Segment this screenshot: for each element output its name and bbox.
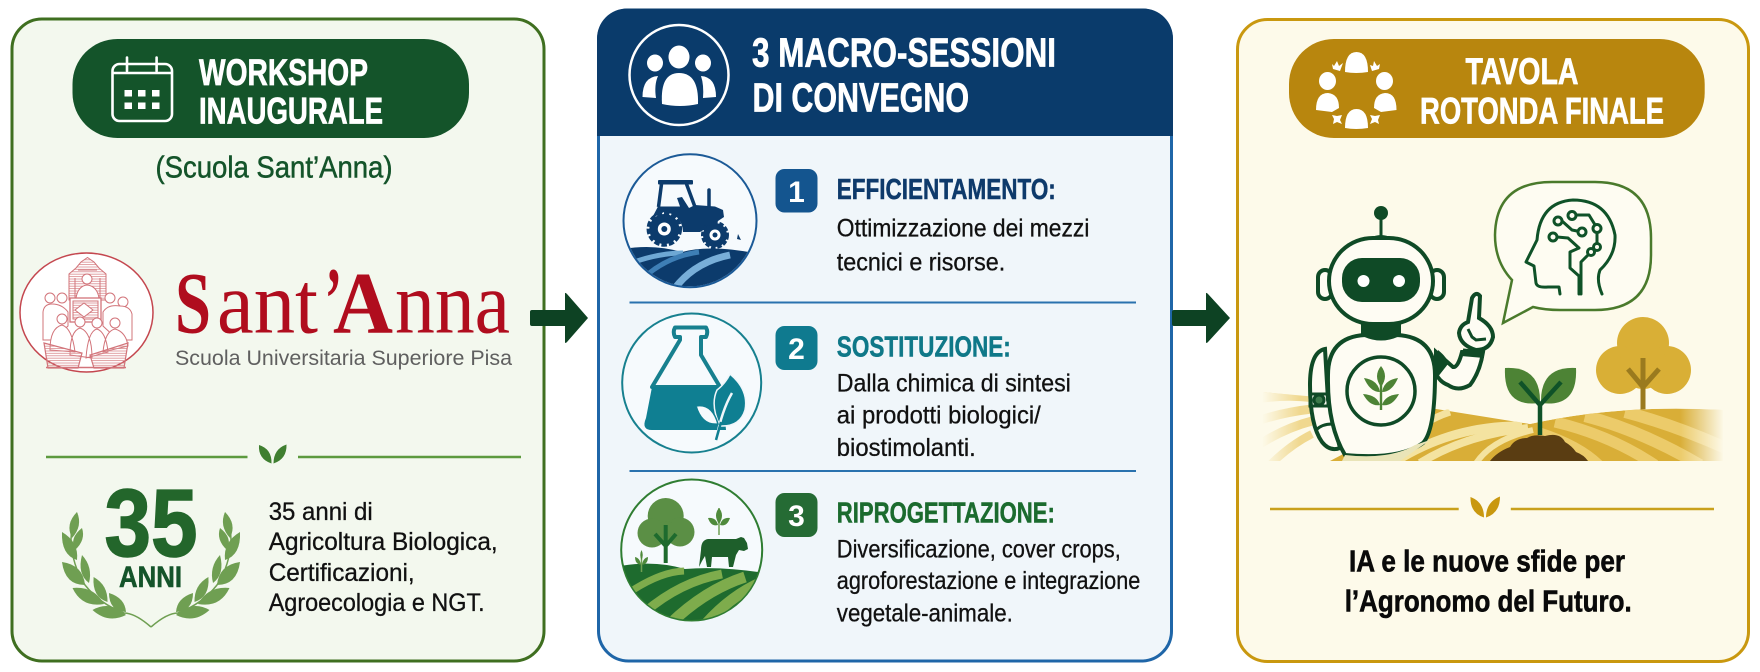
arrow: sessions to tavola	[1172, 293, 1230, 343]
robot left arm	[1310, 349, 1340, 449]
robot body	[1328, 335, 1435, 456]
icon: tractor	[620, 154, 760, 290]
badge: 35 anni laurel	[62, 470, 240, 627]
badge: number 1	[776, 169, 818, 212]
badge: number 2: 2	[788, 333, 805, 366]
text: 35 anni description: 35 anni di	[269, 498, 373, 526]
icon: round table	[1316, 52, 1396, 129]
description: sostituzione: ai prodotti biologici/	[837, 402, 1041, 430]
subheading: scuola sant'anna: (Scuola Sant’Anna)	[156, 150, 392, 184]
description: sostituzione: Dalla chimica di sintesi	[837, 370, 1071, 398]
title: riprogettazione: RIPROGETTAZIONE:	[837, 498, 1055, 530]
logo wordmark: sant'anna: nna	[395, 256, 510, 353]
tavola header pill	[1289, 39, 1705, 138]
text: 35 anni description: Agricoltura Biologica,	[269, 528, 498, 556]
robot chest emblem	[1347, 357, 1415, 425]
robot hand	[1459, 294, 1493, 350]
icon: head with circuits	[1526, 200, 1615, 294]
icon: calendar	[112, 58, 172, 121]
workshop header pill	[72, 39, 469, 138]
icon: gold tree	[1596, 317, 1691, 412]
logo subtitle: Scuola Universitaria Superiore Pisa	[175, 347, 512, 370]
description: efficientamento: tecnici e risorse.	[837, 249, 1005, 277]
panel: tavola rotonda	[1238, 20, 1748, 662]
icon: flask with leaf	[622, 314, 761, 452]
session 2: sostituzione	[622, 314, 1071, 462]
workshop heading: WORKSHOP	[199, 52, 368, 93]
closing text: l’Agronomo del Futuro.	[1345, 584, 1632, 619]
session heading: DI CONVEGNO	[752, 75, 969, 121]
icon: soil mound	[1490, 435, 1588, 461]
divider with leaf	[46, 444, 521, 464]
arrow: workshop to sessions	[530, 293, 588, 343]
badge: number 3: 3	[788, 500, 805, 533]
number 35: 35	[104, 470, 198, 577]
icon: laurel wreath	[62, 512, 240, 627]
description: efficientamento: Ottimizzazione dei mezzi	[837, 215, 1089, 243]
illustration: field, sprout and tree	[1260, 317, 1730, 470]
icon: people in circle	[630, 25, 728, 125]
divider with gold leaf	[1270, 496, 1714, 518]
badge: number 2	[776, 326, 818, 370]
icon: speech bubble with ai head	[1495, 182, 1651, 323]
panel: macro-sessioni	[597, 8, 1173, 661]
session 3: riprogettazione	[620, 480, 1140, 628]
logo wordmark: sant'anna: ’	[325, 251, 342, 348]
badge: number 3	[776, 493, 818, 537]
icon: sprout	[1505, 368, 1576, 435]
description: sostituzione: biostimolanti.	[837, 434, 976, 462]
closing text: IA e le nuove sfide per	[1349, 544, 1625, 579]
session header	[597, 8, 1173, 136]
tavola heading: ROTONDA FINALE	[1420, 90, 1664, 132]
text: 35 anni description: Certificazioni,	[269, 559, 415, 587]
text: 35 anni description: Agroecologia e NGT.	[269, 589, 485, 617]
robot right arm	[1436, 352, 1483, 388]
description: riprogettazione: Diversificazione, cover crops,	[837, 536, 1121, 564]
label anni: ANNI	[119, 561, 182, 594]
icon: robot	[1310, 206, 1493, 461]
icon: farm landscape	[620, 480, 765, 626]
description: riprogettazione: agroforestazione e integrazione	[837, 567, 1140, 595]
description: riprogettazione: vegetale-animale.	[837, 600, 1013, 628]
robot head	[1329, 238, 1433, 324]
session 1: efficientamento	[620, 154, 1089, 290]
workshop heading: INAUGURALE	[199, 90, 383, 132]
logo: sant'anna seal	[20, 253, 153, 372]
logo wordmark: sant'anna: S	[175, 256, 211, 353]
tavola heading: TAVOLA	[1466, 51, 1578, 92]
logo wordmark: sant'anna: A	[333, 256, 393, 353]
golden fields	[1264, 392, 1722, 461]
badge: number 1: 1	[788, 176, 805, 209]
panel: workshop inaugurale	[12, 19, 544, 661]
session heading: 3 MACRO-SESSIONI	[752, 30, 1056, 76]
logo wordmark: sant'anna: ant	[217, 256, 318, 353]
title: efficientamento: EFFICIENTAMENTO:	[837, 174, 1056, 206]
title: sostituzione: SOSTITUZIONE:	[837, 332, 1011, 364]
